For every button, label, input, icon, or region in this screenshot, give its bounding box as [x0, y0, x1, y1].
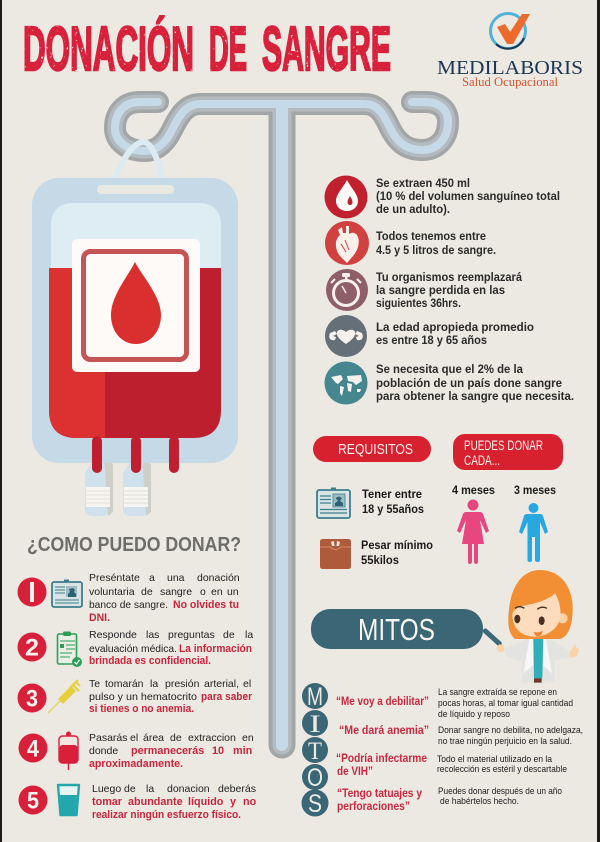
- step 4: 4: [27, 736, 40, 762]
- step 1: Preséntate: [89, 572, 140, 584]
- step 4: 10: [212, 745, 224, 757]
- mitos vertical letters: O: [307, 764, 323, 792]
- icon: blood bag: [59, 732, 78, 770]
- fact: 2% poblacion: [324, 362, 574, 404]
- step 2: 2: [25, 634, 39, 662]
- mitos vertical letters: M: [307, 683, 323, 711]
- requisito: peso: [320, 538, 433, 569]
- woman 4 meses: [452, 483, 495, 564]
- step 4: aproximadamente.: [89, 758, 183, 770]
- requisito: edad: [317, 487, 424, 518]
- step 5: la: [146, 783, 154, 795]
- step 1: banco de sangre.: [89, 599, 168, 611]
- step 4: de: [170, 732, 182, 744]
- step 1: DNI.: [89, 612, 110, 624]
- step 1: o: [200, 586, 206, 598]
- bag label: [72, 239, 200, 372]
- step 3: 3: [26, 686, 38, 712]
- mito 4: [337, 786, 562, 813]
- mito 1: [336, 687, 573, 719]
- bag straps: [112, 142, 164, 186]
- tubes: [92, 436, 179, 473]
- blood bag: [32, 142, 238, 516]
- step 3: presión: [165, 678, 200, 690]
- fact: litros de sangre: [325, 221, 496, 265]
- icon: weighing scale: [320, 539, 351, 569]
- step 1: sangre: [160, 586, 192, 598]
- step 4: [18, 732, 254, 770]
- pointer: [485, 631, 499, 644]
- woman 4 meses: 4 meses: [452, 483, 495, 497]
- icon: clipboard: [58, 632, 82, 667]
- man 3 meses: 3 meses: [514, 483, 556, 497]
- puedes donar heading: CADA...: [464, 453, 500, 468]
- step 2: evaluación médica.: [89, 643, 177, 655]
- man 3 meses: [514, 483, 556, 562]
- mitos vertical letters: [302, 683, 328, 818]
- title: DE: [209, 15, 247, 84]
- mito 1: “Me voy a debilitar”: [336, 694, 429, 708]
- logo: Medilaboris: Salud Ocupacional: [462, 75, 559, 89]
- step 1: No olvides tu: [173, 599, 239, 611]
- mito 3: [336, 751, 567, 778]
- fact: 450 ml: (10 % del volumen sanguíneo total: [376, 190, 560, 203]
- text: SANGRE: [262, 15, 391, 84]
- mitos vertical letters: I: [309, 711, 321, 738]
- step 1: a: [149, 572, 155, 584]
- fact: litros de sangre: Todos tenemos entre: [376, 230, 487, 243]
- fact: edad: La edad apropieda promedio: [376, 321, 534, 334]
- fact: 36 horas: [326, 269, 523, 311]
- step 5: no: [243, 796, 257, 808]
- fact list: [324, 176, 574, 404]
- mito 1: La sangre extraída se repone en: [438, 687, 557, 697]
- step 2: preguntas: [168, 629, 215, 641]
- step 3: la: [150, 678, 158, 690]
- mitos banner: [311, 609, 483, 649]
- step 5: de: [124, 783, 136, 795]
- requisito: peso: Pesar mínimo: [361, 538, 433, 552]
- step 5: realizar ningún esfuerzo físico.: [92, 809, 241, 821]
- fact: 36 horas: siguientes 36hrs.: [376, 297, 461, 310]
- step 5: [18, 783, 257, 821]
- step 3: tomarán: [105, 678, 144, 690]
- step 5: Luego: [92, 783, 121, 795]
- requisito: edad: 18 y 55años: [362, 502, 424, 516]
- fact: 36 horas: la sangre perdida en las: [376, 284, 505, 297]
- step 1: en: [211, 586, 223, 598]
- step 2: de: [223, 629, 235, 641]
- mito 2: no trae ningún perjuicio en la salud.: [438, 736, 572, 746]
- requisito: peso: 55kilos: [361, 553, 399, 567]
- step 2: Responde: [89, 629, 137, 641]
- fact: 450 ml: de un adulto).: [376, 203, 450, 216]
- icon: glass of water: [58, 785, 79, 815]
- fact: 450 ml: [324, 176, 560, 218]
- mito 4: Puedes donar después de un año: [438, 786, 562, 796]
- step 1: un: [227, 586, 239, 598]
- step 4: permanecerás: [131, 745, 204, 757]
- requisito: edad: Tener entre: [362, 487, 422, 501]
- step 2: las: [146, 629, 159, 641]
- step 3: [18, 678, 253, 715]
- step 5: abundante: [128, 796, 183, 808]
- puedes donar heading: [453, 434, 563, 470]
- step 1: voluntaria: [89, 586, 135, 598]
- icon: ID card: [317, 488, 350, 518]
- step 1: donación: [197, 572, 240, 584]
- step 4: min: [233, 745, 252, 757]
- mito 3: Todo el material utilizado en la: [437, 754, 553, 764]
- step 5: tomar: [92, 796, 123, 808]
- blood fill: [49, 268, 221, 438]
- requisitos heading: [313, 436, 431, 462]
- mito 3: de VIH”: [337, 764, 373, 778]
- mito 4: perforaciones”: [337, 799, 410, 813]
- step 3: para saber: [201, 691, 253, 703]
- fact: edad: [325, 315, 534, 357]
- step 5: líquido: [188, 796, 224, 808]
- fact: 36 horas: Tu organismos reemplazará: [376, 271, 523, 284]
- title: DONACIÓN: [23, 15, 194, 84]
- icon: syringe: [48, 680, 80, 713]
- step 4: Pasarás: [89, 732, 128, 744]
- step 2: brindada es confidencial.: [89, 655, 211, 667]
- fact: 2% poblacion: Se necesita que el 2% de la: [376, 363, 524, 376]
- step 5: deberás: [218, 783, 256, 795]
- step 3: si tienes o no anemia.: [89, 703, 194, 715]
- logo: Medilaboris: [437, 14, 583, 89]
- step 4: el: [130, 732, 138, 744]
- fact: edad: es entre 18 y 65 años: [376, 334, 487, 347]
- step 3: Te: [89, 678, 100, 690]
- mito 1: pocas horas, al tomar igual cantidad: [438, 698, 573, 708]
- mito 4: de habértelos hecho.: [440, 796, 519, 806]
- fact: 2% poblacion: población de un país done sangre: [376, 377, 563, 390]
- mito 3: “Podría infectarme: [336, 751, 427, 765]
- fact: 450 ml: Se extraen 450 ml: [376, 177, 470, 190]
- step 1: de: [141, 586, 153, 598]
- step 2: [18, 629, 253, 667]
- step 2: la: [245, 629, 253, 641]
- step 5: y: [230, 796, 236, 808]
- fact: litros de sangre: 4.5 y 5 litros de sangre.: [376, 244, 496, 257]
- mitos vertical letters: S: [308, 790, 322, 818]
- requisitos heading: REQUISITOS: [338, 441, 413, 458]
- step 3: pulso y un hematocrito: [89, 691, 197, 703]
- mito 1: de líquido y reposo: [438, 709, 510, 719]
- step 4: área: [143, 732, 164, 744]
- step 2: La información: [179, 643, 252, 655]
- mito 2: [339, 723, 583, 746]
- step 4: extraccion: [188, 732, 236, 744]
- fact: 2% poblacion: para obtener la sangre que necesita.: [376, 390, 574, 403]
- mito 3: recolección es estéril y descartable: [437, 764, 567, 774]
- small collection bags: [85, 455, 151, 516]
- mitos vertical letters: T: [308, 738, 322, 765]
- step 4: en: [242, 732, 254, 744]
- mito 4: “Tengo tatuajes y: [337, 786, 422, 800]
- step 1: una: [167, 572, 185, 584]
- step 1: [18, 572, 240, 624]
- step 5: 5: [27, 788, 39, 814]
- logo: Medilaboris: MEDILABORIS: [437, 57, 583, 79]
- step 5: donacion: [167, 783, 210, 795]
- mito 2: “Me dará anemia”: [339, 723, 429, 737]
- mito 2: Donar sangre no debilita, no adelgaza,: [438, 725, 583, 735]
- step 4: donde: [89, 745, 118, 757]
- step 3: arterial,: [204, 678, 239, 690]
- step 3: el: [243, 678, 251, 690]
- doctor illustration: [485, 570, 579, 683]
- mitos banner: MITOS: [358, 612, 435, 647]
- icon: ID card: [52, 580, 82, 607]
- heading: como puedo donar: ¿COMO PUEDO DONAR?: [27, 533, 241, 556]
- IV pole: [115, 102, 448, 745]
- puedes donar heading: PUEDES DONAR: [464, 438, 543, 453]
- blood drop: [111, 262, 161, 344]
